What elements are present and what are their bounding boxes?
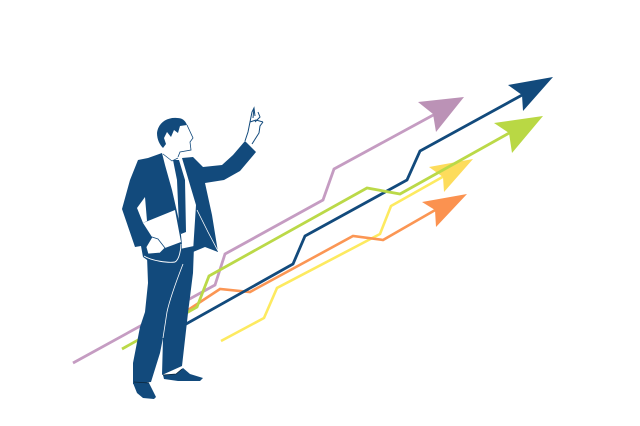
- shoe: left: [133, 383, 156, 399]
- arrow: yellow: [221, 159, 473, 341]
- shoe: right: [163, 368, 203, 381]
- arrow: green: [122, 116, 543, 349]
- face: [163, 120, 193, 160]
- raised hand: [245, 108, 263, 144]
- hand on tablet: [146, 237, 165, 254]
- arm gap: [137, 197, 147, 223]
- jacket lapel line: [197, 210, 218, 251]
- jacket right side and raised arm: [182, 141, 256, 252]
- jacket left side: [122, 153, 182, 263]
- jacket pocket edge: [144, 244, 181, 262]
- tablet: [143, 210, 181, 248]
- arrow: navy: [170, 77, 553, 333]
- trousers: [133, 246, 194, 384]
- shoe cuff line: left: [134, 382, 149, 383]
- trouser crease: [163, 264, 183, 338]
- shirt: [163, 155, 196, 236]
- arrow: orange: [185, 194, 467, 312]
- necktie: [173, 160, 186, 234]
- collar: [163, 154, 178, 161]
- arrow: pink: [73, 97, 464, 363]
- hair: [157, 118, 187, 148]
- face profile line: [178, 125, 193, 157]
- figure: businessman: [122, 108, 263, 399]
- shoe cuff line: right: [163, 369, 182, 375]
